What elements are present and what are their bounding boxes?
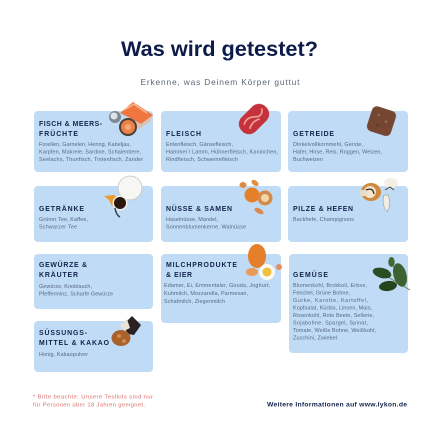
heading: Gemüse: GEMÜSE bbox=[293, 270, 328, 279]
subtitle: Erkenne, was Deinem Körper guttut bbox=[140, 77, 300, 87]
heading: Fisch: FISCH & MEERS- bbox=[39, 121, 103, 128]
panel: Süßungsmittel & Kakao bbox=[34, 316, 153, 372]
text: Fisch list: Seelachs, Thunfisch, Tintenfisch, Zander bbox=[39, 157, 143, 163]
icon: salmon and seafood bbox=[109, 102, 153, 136]
text: Süßungsmittel list: Honig, Kakaopulver bbox=[39, 352, 88, 358]
text: Gemüse list: Kopfsalat, Kürbis, Linsen, Mais, bbox=[293, 306, 372, 312]
panel: Nüsse & Samen bbox=[161, 179, 281, 242]
panel: Fleisch bbox=[161, 100, 281, 172]
text: Gemüse list: Gurke, Karotte, Kartoffel, bbox=[293, 298, 368, 304]
panel: Gemüse bbox=[289, 254, 410, 353]
icon: coffee cup bbox=[104, 176, 142, 217]
icon: nuts bbox=[240, 179, 272, 216]
text: Milchprodukte list: Schafmilch, Ziegenmilch bbox=[164, 299, 225, 305]
panel: Gewürze & Kräuter bbox=[34, 254, 153, 309]
panel: Milchprodukte & Eier bbox=[161, 244, 282, 323]
heading: Getreide: GETREIDE bbox=[293, 131, 334, 138]
text: Fleisch list: Hammel / Lamm, Hühnerfleisch, Kaninchen, bbox=[166, 150, 278, 156]
website link: Weitere Informationen auf www.lykon.de bbox=[267, 402, 407, 409]
icon: mushrooms bbox=[360, 178, 398, 212]
heading: Gewürze: KRÄUTER bbox=[39, 271, 78, 279]
heading: Fisch: FRÜCHTE bbox=[39, 129, 78, 138]
footnote: für Personen über 18 Jahren geeignet. bbox=[33, 403, 145, 409]
panel: Getränke bbox=[34, 176, 153, 242]
heading: Fleisch: FLEISCH bbox=[166, 131, 201, 138]
title: Was wird getestet? bbox=[121, 37, 318, 61]
icon: bread bbox=[366, 105, 397, 137]
icon: eggs bbox=[246, 244, 282, 280]
text: Gemüse list: Blumenkohl, Brokkoli, Erbse, bbox=[293, 283, 368, 289]
footnote: * Bitte beachte: Unsere Testkits sind nur bbox=[33, 394, 153, 400]
text: Gemüse list: Zucchini, Zwiebel bbox=[293, 336, 337, 342]
icon: meat bbox=[235, 100, 273, 138]
text: Nüsse list: Sonnenblumenkerne, Walnüsse bbox=[166, 225, 246, 231]
text: Gemüse list: Rosenkohl, Rote Beete, Sellerie, bbox=[293, 313, 374, 319]
text: Gewürze list: Pfefferminz, Scharfe Gewürze bbox=[39, 292, 113, 298]
text: Fleisch list: Entenfleisch, Gänsefleisch, bbox=[166, 142, 234, 148]
heading: Milchprodukte: MILCHPRODUKTE bbox=[166, 262, 237, 269]
heading: Pilze: PILZE & HEFEN bbox=[293, 206, 353, 213]
text: Getreide list: Dinkelvollkornmehl, Gerste, bbox=[293, 142, 364, 148]
text: Gemüse list: Sojabohne, Spargel, Spinat, bbox=[293, 320, 368, 326]
text: Milchprodukte list: Edamer, Ei, Emmentaler, Gouda, Joghurt, bbox=[164, 283, 270, 289]
text: Fisch list: Forellen, Garnelen, Hering, Kabeljau, bbox=[39, 142, 132, 148]
panel: Getreide bbox=[288, 105, 408, 172]
heading: Süßungsmittel: MITTEL & KAKAO bbox=[39, 340, 110, 347]
icon: spinach bbox=[372, 257, 410, 292]
text: Gemüse list: Tomate, Weiße Bohne, Weißkohl, bbox=[293, 328, 376, 334]
text: Nüsse list: Haselnüsse, Mandel, bbox=[166, 217, 218, 223]
text: Getränke list: Schwarzer Tee bbox=[39, 225, 77, 231]
text: Getränke list: Grüner Tee, Kaffee, bbox=[39, 217, 88, 223]
text: Getreide list: Buchweizen bbox=[293, 157, 323, 163]
text: Fleisch list: Rindfleisch, Schweinefleisch bbox=[166, 157, 238, 163]
text: Gemüse list: Fenchel, Grüne Bohne, bbox=[293, 290, 350, 296]
heading: Getränke: GETRÄNKE bbox=[39, 205, 84, 213]
heading: Süßungsmittel: SÜSSUNGS- bbox=[39, 328, 88, 337]
heading: Nüsse: NÜSSE & SAMEN bbox=[166, 204, 232, 213]
text: Milchprodukte list: Kuhmilch, Mozzarella, Parmesan, bbox=[164, 291, 248, 297]
icon: chocolate and honey bbox=[112, 316, 141, 346]
panel: Pilze & Hefen bbox=[288, 178, 408, 242]
text: Fisch list: Karpfen, Makrele, Sardine, Schalentiere, bbox=[39, 150, 142, 156]
text: Gewürze list: Gewürze, Knoblauch, bbox=[39, 284, 92, 290]
panel: Fisch & Meeresfrüchte bbox=[34, 102, 153, 172]
text: Pilze list: Backhefe, Champignons bbox=[293, 217, 354, 223]
text: Getreide list: Hafer, Hirse, Reis, Roggen, Weizen, bbox=[293, 150, 382, 156]
heading: Gewürze: GEWÜRZE & bbox=[39, 260, 87, 269]
heading: Milchprodukte: & EIER bbox=[166, 272, 192, 279]
